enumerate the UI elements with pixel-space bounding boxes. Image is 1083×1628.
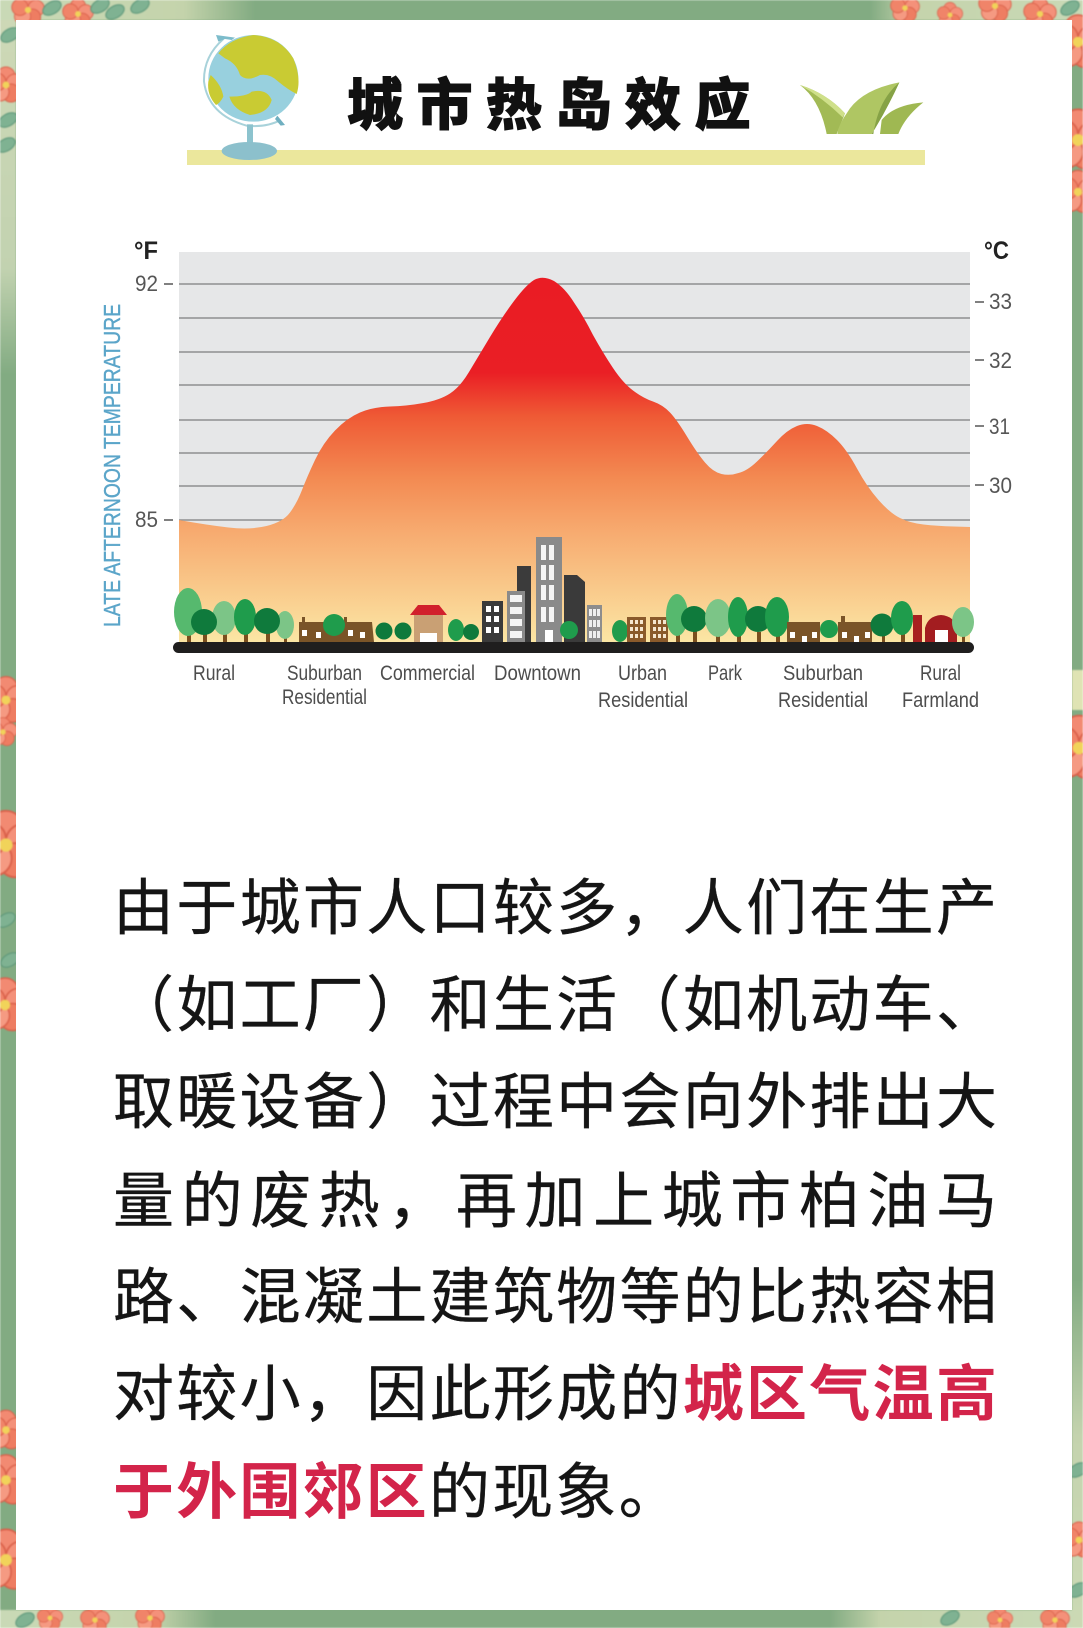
zone labels: Commercial xyxy=(380,662,475,685)
zone labels: Rural xyxy=(193,662,235,685)
zone labels: Suburban xyxy=(287,662,362,685)
right axis labels: 33 xyxy=(989,289,1012,314)
icon: grass leaves xyxy=(800,82,924,134)
right axis labels: °C xyxy=(984,237,1009,265)
body text paragraph: 取暖设备）过程中会向外排出大 xyxy=(113,1068,997,1136)
body text paragraph: （如工厂）和生活（如机动车、 xyxy=(113,971,997,1039)
zone labels: Farmland xyxy=(902,689,979,712)
body text paragraph: 于外围郊区的现象。 xyxy=(113,1458,682,1526)
left axis labels: 92 xyxy=(135,271,158,296)
body text paragraph: 由于城市人口较多，人们在生产 xyxy=(113,874,997,942)
zone labels: Suburban xyxy=(783,662,863,685)
icon: globe xyxy=(203,35,299,160)
temperature curve area xyxy=(179,278,970,642)
city skyline and trees xyxy=(174,537,974,643)
chart: urban heat island temperature profile xyxy=(99,237,1012,712)
body text paragraph: 路、混凝土建筑物等的比热容相 xyxy=(113,1263,997,1331)
left axis labels xyxy=(134,237,173,532)
zone labels xyxy=(193,662,979,712)
body text paragraph xyxy=(113,874,997,1526)
left axis labels: 85 xyxy=(135,507,158,532)
title: 城市热岛效应 xyxy=(347,74,764,137)
zone labels: Residential xyxy=(598,689,688,712)
right axis labels: 31 xyxy=(989,414,1010,439)
body text paragraph: 量的废热，再加上城市柏油马 xyxy=(113,1167,997,1235)
zone labels: Urban xyxy=(618,662,667,685)
right axis labels xyxy=(975,237,1012,498)
body text paragraph: 对较小，因此形成的城区气温高 xyxy=(113,1360,997,1428)
zone labels: Residential xyxy=(778,689,868,712)
zone labels: Residential xyxy=(282,686,367,709)
title underline bar xyxy=(187,150,925,165)
right axis labels: 30 xyxy=(989,473,1012,498)
zone labels: Park xyxy=(708,662,742,685)
zone labels: Rural xyxy=(920,662,961,685)
zone labels: Downtown xyxy=(494,662,581,685)
plot background xyxy=(179,252,970,642)
left axis labels: °F xyxy=(134,237,158,265)
y-axis title: LATE AFTERNOON TEMPERATURE xyxy=(99,304,125,627)
ground bar xyxy=(173,642,974,653)
right axis labels: 32 xyxy=(989,348,1012,373)
